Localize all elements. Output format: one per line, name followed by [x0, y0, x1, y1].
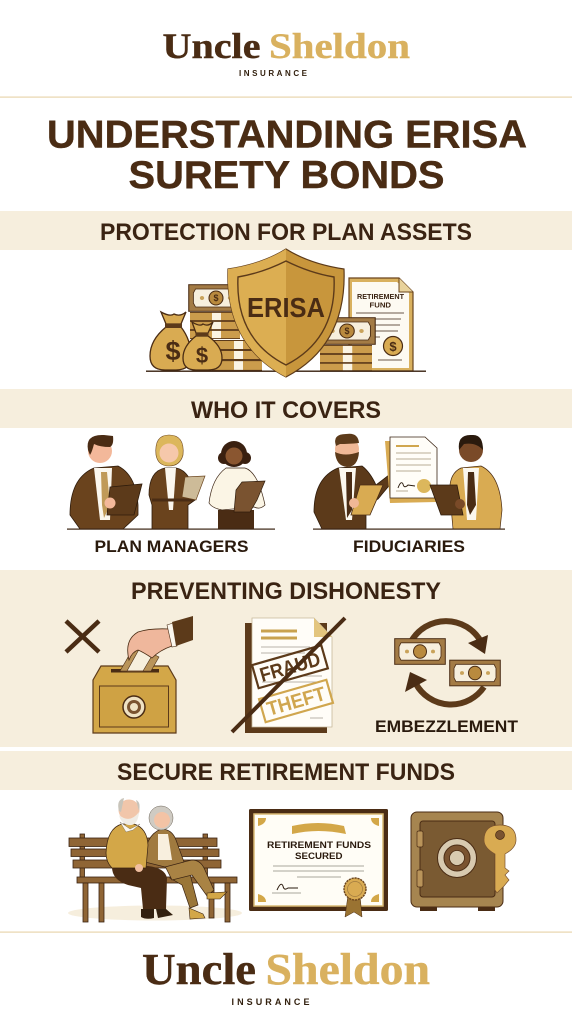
section heading: protection for plan assets — [0, 211, 572, 250]
gold clipboard — [351, 485, 383, 515]
icon: ERISA shield — [228, 249, 344, 377]
icon: fraud and theft document crossed out — [232, 618, 345, 733]
left money stack — [189, 285, 262, 371]
label: embezzlement: EMBEZZLEMENT — [375, 718, 518, 736]
heading: PREVENTING DISHONESTY — [131, 578, 441, 605]
money bags — [150, 312, 222, 370]
person: fiduciary 1 — [314, 434, 398, 529]
icon: fraud and theft document crossed out: THEFT — [264, 683, 328, 721]
left money stack: $ — [213, 293, 219, 303]
icon: ERISA shield: ERISA — [247, 292, 325, 323]
fiduciaries document — [385, 437, 437, 503]
key — [484, 825, 516, 893]
title — [47, 113, 527, 197]
label: FIDUCIARIES — [353, 538, 465, 556]
footer logo: Uncle — [142, 945, 256, 994]
icon: hand dropping money into box — [93, 616, 193, 733]
section heading: who it covers — [0, 389, 572, 428]
icon: embezzlement cycle — [395, 621, 500, 705]
illustration: couple on bench — [68, 798, 242, 922]
footer logo: Sheldon — [266, 945, 430, 994]
money bags: $ — [165, 336, 181, 366]
icon: fraud and theft document crossed out: FRAUD — [257, 649, 323, 687]
right money stack — [319, 318, 375, 371]
man — [106, 798, 173, 919]
person: manager 2 — [149, 435, 205, 529]
illustration: certificate: RETIREMENT FUNDS — [267, 840, 371, 850]
illustration: certificate: SECURED — [295, 851, 343, 861]
header logo: INSURANCE — [239, 69, 308, 78]
panel: preventing dishonesty — [0, 570, 572, 747]
retirement fund document: FUND — [370, 300, 391, 310]
section heading: who it covers: WHO IT COVERS — [191, 397, 381, 424]
retirement fund document: $ — [389, 339, 397, 354]
icon: X mark — [66, 621, 99, 652]
person: manager 3 — [209, 441, 265, 529]
label: PLAN MANAGERS — [94, 538, 248, 556]
retirement fund document: RETIREMENT — [357, 292, 405, 301]
illustration: plan managers — [67, 435, 275, 556]
ground line — [146, 370, 426, 372]
person: fiduciary 2 — [430, 435, 502, 529]
illustration: protection for plan assets — [146, 249, 426, 377]
footer logo — [142, 945, 430, 1007]
section heading: secure retirement funds — [0, 751, 572, 790]
icon: safe and key — [411, 812, 516, 911]
right money stack: $ — [344, 326, 350, 336]
title: SURETY BONDS — [128, 154, 444, 197]
illustration: certificate — [249, 809, 388, 917]
woman — [145, 806, 227, 919]
retirement fund document — [349, 278, 413, 371]
header logo — [162, 26, 410, 78]
header logo: Uncle — [162, 26, 261, 66]
section heading: secure retirement funds: SECURE RETIREMENT FUNDS — [117, 759, 455, 786]
section heading: protection for plan assets: PROTECTION FOR PLAN ASSETS — [100, 219, 472, 246]
header logo: Sheldon — [269, 26, 410, 66]
illustration: fiduciaries — [313, 434, 505, 556]
person: manager 1 — [70, 435, 142, 529]
bench — [69, 834, 237, 922]
money bags: $ — [196, 343, 208, 368]
footer logo: INSURANCE — [232, 997, 310, 1007]
title: UNDERSTANDING ERISA — [47, 113, 527, 156]
